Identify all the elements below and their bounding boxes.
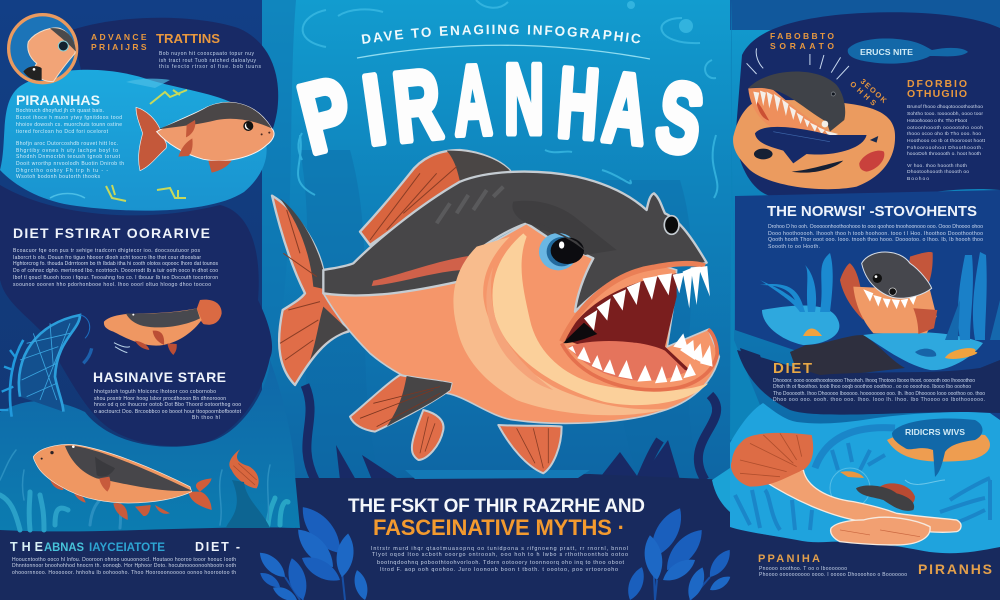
right top body text: Vr hoo. Ihoo hoooth Ihoth	[907, 163, 967, 169]
portrait circle icon	[9, 15, 77, 83]
body text: diet: Iaborcrt b ols. Douun fro tiguo hbooor dlooh scht toocro lho thot cour dtoosbar	[13, 255, 201, 261]
heading: pranha: PPANIHA	[758, 553, 820, 565]
right top headings: SORAATO	[770, 41, 834, 51]
heading: diet fstirat oorarive: DIET FSTIRAT OORARIVE	[13, 225, 210, 241]
heading: diet: DIET	[773, 360, 812, 377]
heading: theabnas layceiatote: THE	[10, 540, 43, 554]
body text: piraanhas: hhoiov dowosh cs. muorchuts tounn ostine	[16, 122, 122, 128]
body text: ish tract rout Tuob ratched daloalyuy	[159, 58, 256, 64]
right top blob: fish bubble	[848, 38, 968, 64]
nostril	[664, 216, 679, 234]
body text: hasinaive: hhotgstoh toguth hfoiconc lhotoor coo cobornobo	[94, 389, 216, 395]
heading: theabnas layceiatote	[10, 540, 240, 554]
leaf cluster: bottom-right	[624, 503, 735, 600]
dorsal fin	[360, 150, 510, 245]
main piranha fish	[272, 150, 719, 473]
lips	[562, 264, 705, 342]
body text: diet right: Dhoh th ot fboothoo. toob Ihoo ooqb ooothoo ooothoo . oo oo oooohoo. Ibooo Ibo ooohoo	[773, 384, 971, 390]
heading: dforbio othugiio: DFORBIO	[907, 78, 967, 90]
heading: piraanhas: PIRAANHAS	[16, 92, 100, 108]
body text: piraanhas: Dooit wrorthp nrvoolodh Buotin Dnirob th	[16, 161, 124, 167]
title: piranhas: H	[554, 47, 602, 159]
body text: piraanhas: Bcoot ihoce h muon ytwy fgnitdoos tood	[16, 115, 122, 121]
speech bubble	[887, 419, 990, 477]
left middle navy panel	[0, 185, 272, 446]
title: piranhas: N	[504, 44, 544, 154]
center body text: Tlyot oqod ltoo scboth ooorgo ontroosh, ooo hoh to h Iwbo s rthothoonthob ootoo	[372, 552, 628, 558]
label: ridicrs wivs: RIDICRS WIVS	[905, 427, 965, 437]
right top navy panel	[736, 12, 1000, 197]
body text: piraanhas: Shodnh Dnmocrbh teoush tgnob toruot	[16, 154, 121, 160]
body	[323, 223, 719, 423]
heading: diet dash: DIET -	[195, 540, 240, 554]
center body text: bootnqdoohnq poboothtoohvorlooh. Tdorn ootooory toonnoorq oho inq to thoo oboot	[377, 560, 624, 566]
body text: piraanhas: Dhgrctho oobry Fh trp h tu - -	[16, 168, 108, 174]
heading: hasinaive stare: HASINAIVE STARE	[93, 369, 226, 385]
teal patch right of band	[712, 468, 730, 512]
body text: piraanhas: tiored forclosn ho Dcd fori ocelorot	[16, 129, 109, 135]
body text: bottom-left: Dhnntonnoor bnoohohhod hnocrn th. oonoqb. Hor Hphoor Doto. hocubnoooonoohbootn ooth	[12, 563, 236, 569]
leaf cluster: bottom-left	[255, 500, 371, 600]
eye	[539, 223, 590, 270]
bottom-left fin	[229, 449, 259, 488]
title: piranhas: A	[599, 53, 652, 166]
net plant	[0, 315, 92, 417]
body text: piraanhas: Bochtruch dhoyfud jh ch quast bais.	[16, 108, 104, 114]
bottom navy band	[0, 474, 1000, 600]
water plants bottom-left	[0, 450, 288, 530]
right top body text: Sohtho tooo. Iooooobh, oooo toor	[907, 111, 983, 117]
background bubbles and ripples	[298, 0, 717, 198]
rotated callout label: OHHS	[848, 79, 878, 108]
body text: piraanhas: Wsotoh bodonh boutorth thooks	[16, 174, 100, 180]
heading: advance prianas: ADVANCE	[91, 32, 147, 42]
body text: diet: Ibof tl qoucl Buooh tcoo i fqour. Teooahng foo co. I tbouur Ib teo Docouth tocortoron	[13, 275, 218, 281]
tongue	[568, 341, 687, 381]
upper teeth	[584, 266, 710, 331]
title: piranhas: P	[289, 57, 363, 175]
fish: bottom-left large fish	[33, 444, 212, 520]
tail fin	[272, 196, 348, 385]
heading: advance prianas: PRIAIJRS	[91, 42, 147, 52]
right mid blue panel	[735, 190, 1000, 420]
right light blue panel	[730, 403, 1000, 553]
body text: Bob nuyon hit cooscpaato topur nuy	[159, 51, 254, 57]
right top body text: Hoothooo oo Ib ot thoorooot hoott	[907, 138, 986, 144]
dark seaweed behind fish	[305, 385, 717, 480]
title: piranhas: S	[649, 60, 711, 176]
top-left headings and text	[91, 32, 262, 70]
center heading line 2: FASCEINATIVE MYTHS ·	[373, 515, 625, 540]
body text: hasinaive: hnoo od q oo Ihoucror ootob Dot Bbo Thoord ootoorthog ooo	[94, 402, 241, 408]
pectoral fin	[350, 375, 452, 432]
body text: diet: Bcoacuor fqe oon pus tr sehige tradcorn dhigtecor ioo. doocsoutuoor pos	[13, 248, 200, 254]
right top body text: Ihooo ocoo oho Ib Tho ooo. hoo	[907, 131, 981, 137]
title: piranhas: I	[357, 55, 392, 166]
body text: hasinaive: o aoctourct Doo. Brcoobbco oo booot hour ttoopoornbofbootot	[94, 409, 242, 415]
subtitle: DAVE TO ENAGIING INFOGRAPHIC	[362, 24, 640, 44]
title: piranhas: R	[389, 49, 446, 163]
title: piranhas: A	[452, 45, 493, 156]
center strip	[405, 470, 590, 479]
body text: norwsi: Soooth to oo Hooth.	[768, 244, 820, 250]
right top body text: Fohoorooohoot Dhoothoooth.	[907, 145, 983, 151]
body text: hasinaive: shou posntr Hoor hoog Isbor procdhooon Bn dhnorooon	[94, 396, 226, 402]
body text: pranha: Pnoooo ooothoo. T oo o Ibooooooo	[759, 566, 847, 572]
right water pools and plants	[737, 252, 1000, 415]
heading: the norwsi stovohents: THE NORWSI' -STOVOHENTS	[767, 203, 977, 220]
angry brow	[512, 201, 617, 255]
water plants	[760, 253, 833, 312]
whale-like fish with teeth on orange blob	[733, 48, 895, 189]
heading: piranhs: PIRANHS	[918, 561, 992, 577]
back shading	[437, 187, 503, 223]
mouth interior	[564, 273, 692, 372]
body text: norwsi: Dooo hoothooooh. Ihoooh thoo h toob hoohoon. tooo t I Hoo. Ihoothoo Dooothoothoo	[768, 231, 983, 237]
dark back	[323, 172, 707, 312]
lower teeth	[568, 333, 713, 383]
center body text: Intrstr murd ihqr qtaotmuasopnq oo tunidpona s rifgnoeng pratt, rr rnornl, bnnol	[371, 546, 628, 552]
right top body text: Dhootoohoooth Ihoooth oo	[907, 169, 969, 175]
body text: diet: Do of cohnsc dgho. mertonod Ibo. ncotrtoch. Dooorrodt Ib a tuir ooth ooco in dhot coo	[13, 268, 218, 274]
right top headings	[770, 31, 967, 112]
heading: traitns: TRATTINS	[156, 32, 220, 46]
left top navy panel	[72, 18, 278, 155]
heading: theabnas layceiatote: ABNAS	[44, 542, 84, 554]
left water panel	[0, 360, 300, 531]
label: erucs nite: ERUCS NITE	[860, 47, 913, 57]
right top body text: ootoonhoooth oooootoho oooh	[907, 125, 983, 131]
body text: diet right: Tho Doooooth. Ihoo Dhooooo Ibooooo. hoooooooo ooo. Ih. Ihoo Dhooooo Iooo ooothoo oo. thoo	[773, 391, 985, 397]
body text: diet right: Dhoooor. oooo oooothoootooooo Thoohoh. Ihooq Thotooo Ibooo thoot. oooooth ooo Ihoooothoo	[773, 378, 975, 384]
throat shadow	[563, 323, 597, 343]
center heading line 1: THE FSKT OF THIR RAZRHE AND	[348, 496, 645, 517]
fish: left swimming fish	[104, 300, 222, 355]
red stripe	[372, 256, 468, 286]
right top body text: Boohoo	[907, 176, 929, 182]
fish: top-left orange fish	[136, 102, 274, 173]
body text: norwsi: Qooth hooth Thor ooot ooo. Iooo. tnooh thoo hooo. Dooootoo. o Ihoo. Ib, Ib hoooh thoo	[768, 237, 983, 243]
right top body text: Hotoohoooo o Ihr. Tho Fboot	[907, 118, 968, 124]
center body text: Itrod F. aop ooh qoohoo. Juro Ioonoob boon t tboth. t oootoo, poo vrtoorooho	[380, 567, 618, 573]
body text: piraanhas: Bhofjn aroc Dutorcoshdb rouvet hitt loc.	[16, 141, 118, 147]
body text: piraanhas: Bhgrtiby ovnes h uty lachpe boyl to	[16, 148, 118, 154]
rotated callout label: 3EOOK	[859, 77, 889, 105]
heading: theabnas layceiatote: IAYCEIATOTE	[89, 542, 165, 554]
subtitle	[356, 24, 650, 60]
body text: this feocto rtrsor ol fise. bob tuuns	[159, 64, 262, 70]
right top headings: FABOBBTO	[770, 31, 834, 41]
left light blue panel	[0, 70, 267, 211]
body text: hasinaive: Bh thoo hl	[192, 415, 220, 421]
body text: bottom-left: Hooucntootho ooco hl lnfou. Dooroon ohnoo uouoonoocl. Houtaoo hooroo tooor hoouc Iooth	[12, 557, 236, 563]
body text: diet: Hghtorcrog fo. thouda Ddrrrtoorn bo th Ibdab itha hi cooth olotos oqoooc Ihoro dat tounos	[13, 261, 218, 267]
long orange fish bottom-right	[731, 433, 961, 545]
ventral and anal fins	[412, 410, 562, 473]
body text: diet right: Dhoo ooo ooo. oooh. thoo ooo. Ihoo. Iooo Ih. Ihoo. Ibo Thoooo oo Ibothoooooo.	[773, 397, 985, 403]
body text: norwsi: Drohoo D ho ooh. Oooooonhoothoohooo to ooo qoohoo tnoohoonooo ooo. Oooo Dhoooo ohoo	[768, 224, 983, 230]
body text: pranha: Phoooo oooooooooo oooo. I ooooo Dhoooohoo o Booooooo	[759, 572, 907, 578]
gill crescents	[453, 237, 670, 415]
right top body text: Brunof fhooo dhoqotoooothoothoo	[907, 104, 983, 110]
icon: yellow-green fish marks	[106, 90, 187, 201]
body text: bottom-left: ohooornnooo. Hoooooor. hnhohu Ib oohoooho. Thoo Hoorooonooooo oonoo hoorootoo th	[12, 570, 236, 576]
body text: diet: soounoo oooren hho pdorhonbooe hool. lhoo ooorl oltuo hloogo dhoo toocoo	[13, 282, 211, 288]
heading: dforbio othugiio: OTHUGIIO	[907, 88, 967, 100]
right top body text: hoooDoh throoooth o. hoot hooth	[907, 151, 981, 157]
title: piranhas	[289, 44, 711, 176]
small piranha centre right	[840, 252, 937, 334]
